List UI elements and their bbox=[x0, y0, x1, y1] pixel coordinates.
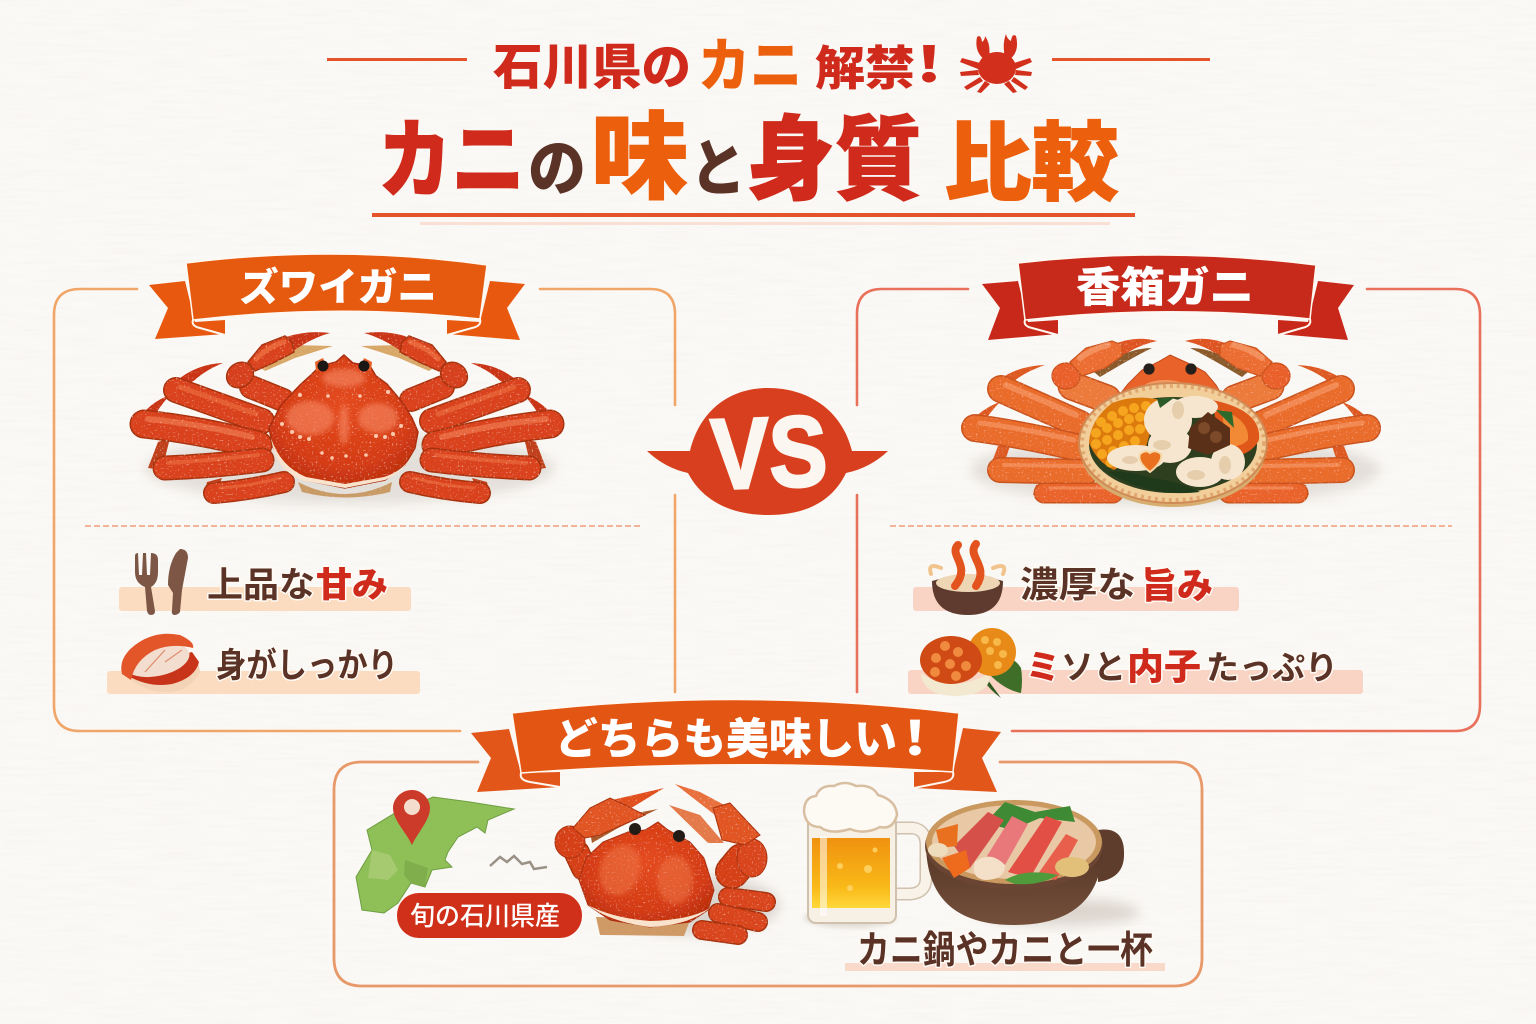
banner: both delicious: ! bbox=[904, 703, 926, 769]
heading: subtitle bbox=[327, 19, 1210, 103]
simmered brown meat bbox=[1188, 412, 1230, 455]
row: rich umami bbox=[913, 544, 1239, 615]
heading: main title bbox=[372, 80, 1135, 225]
heading: main title: の bbox=[528, 118, 586, 208]
heading: main title: 身質 bbox=[747, 86, 922, 219]
crab head bbox=[1114, 355, 1226, 402]
icon: roe on a plate bbox=[920, 628, 1022, 698]
roe bbox=[1089, 398, 1160, 470]
panel: snow crab frame bbox=[54, 289, 675, 731]
banner: both delicious bbox=[471, 700, 1001, 792]
greens bbox=[1108, 472, 1200, 493]
row: rich umami: 濃厚な bbox=[1020, 556, 1136, 608]
label: seasonal Ishikawa bbox=[397, 893, 582, 938]
illustration: crab hot pot bbox=[925, 800, 1140, 926]
caption: crab hot pot and drink: カニ鍋やカニと一杯 bbox=[857, 919, 1153, 974]
banner: kobako crab bbox=[982, 254, 1354, 340]
orange heart garnish bbox=[1139, 451, 1161, 472]
banner: snow crab bbox=[149, 254, 525, 340]
illustration: Ishikawa map bbox=[356, 790, 547, 913]
row: miso and roe bbox=[908, 628, 1363, 698]
row: firm meat bbox=[107, 634, 420, 694]
banner: both delicious: どちらも美味しい bbox=[555, 705, 897, 767]
icon: fork and knife bbox=[135, 549, 188, 615]
coast marks bbox=[490, 856, 547, 869]
icon: crab silhouette bbox=[960, 34, 1032, 93]
heading: subtitle: 石川県の bbox=[493, 28, 691, 99]
panel: kobako crab frame bbox=[857, 289, 1480, 731]
illustration: kobako crab with open shell dish bbox=[968, 339, 1380, 507]
row: elegant sweetness bbox=[119, 549, 411, 615]
heading: subtitle: ! bbox=[916, 26, 942, 96]
illustration: whole crab bbox=[555, 784, 780, 936]
row: elegant sweetness: 甘み bbox=[316, 557, 388, 608]
icon: crab sushi bbox=[121, 634, 200, 692]
crab meat bbox=[1107, 396, 1245, 487]
heading: subtitle: カニ bbox=[698, 19, 802, 103]
dish bbox=[1081, 397, 1265, 507]
illustration: beer mug bbox=[804, 783, 926, 928]
orange slice bbox=[1212, 400, 1259, 457]
heading: main title: 味 bbox=[591, 80, 688, 219]
map pin bbox=[393, 790, 430, 845]
banner: kobako crab: 香箱ガニ bbox=[1076, 254, 1254, 315]
row: miso and roe: 内子 bbox=[1127, 638, 1201, 690]
row: miso and roe: ソと bbox=[1061, 640, 1126, 689]
heading: main title: 比較 bbox=[944, 93, 1119, 218]
row: miso and roe: ミ bbox=[1026, 640, 1060, 689]
title underline bbox=[372, 213, 1135, 225]
row: firm meat: 身がしっかり bbox=[216, 638, 398, 687]
row: elegant sweetness: 上品な bbox=[207, 566, 315, 605]
icon: steaming bowl bbox=[930, 544, 1004, 615]
divider bbox=[85, 525, 1452, 527]
heading: main title: カニ bbox=[378, 90, 525, 215]
badge: VS bbox=[647, 388, 888, 515]
heading: main title: と bbox=[690, 118, 746, 208]
badge: VS: VS bbox=[709, 395, 829, 511]
illustration: snow crab bbox=[138, 332, 556, 504]
label: seasonal Ishikawa: 旬の石川県産 bbox=[410, 896, 560, 933]
row: miso and roe: たっぷり bbox=[1206, 641, 1338, 689]
hot pot ingredients bbox=[928, 802, 1089, 884]
heading: subtitle: 解禁 bbox=[815, 30, 915, 99]
panel: bottom frame bbox=[334, 762, 1202, 986]
row: rich umami: 旨み bbox=[1141, 557, 1213, 609]
banner: snow crab: ズワイガニ bbox=[239, 257, 437, 313]
